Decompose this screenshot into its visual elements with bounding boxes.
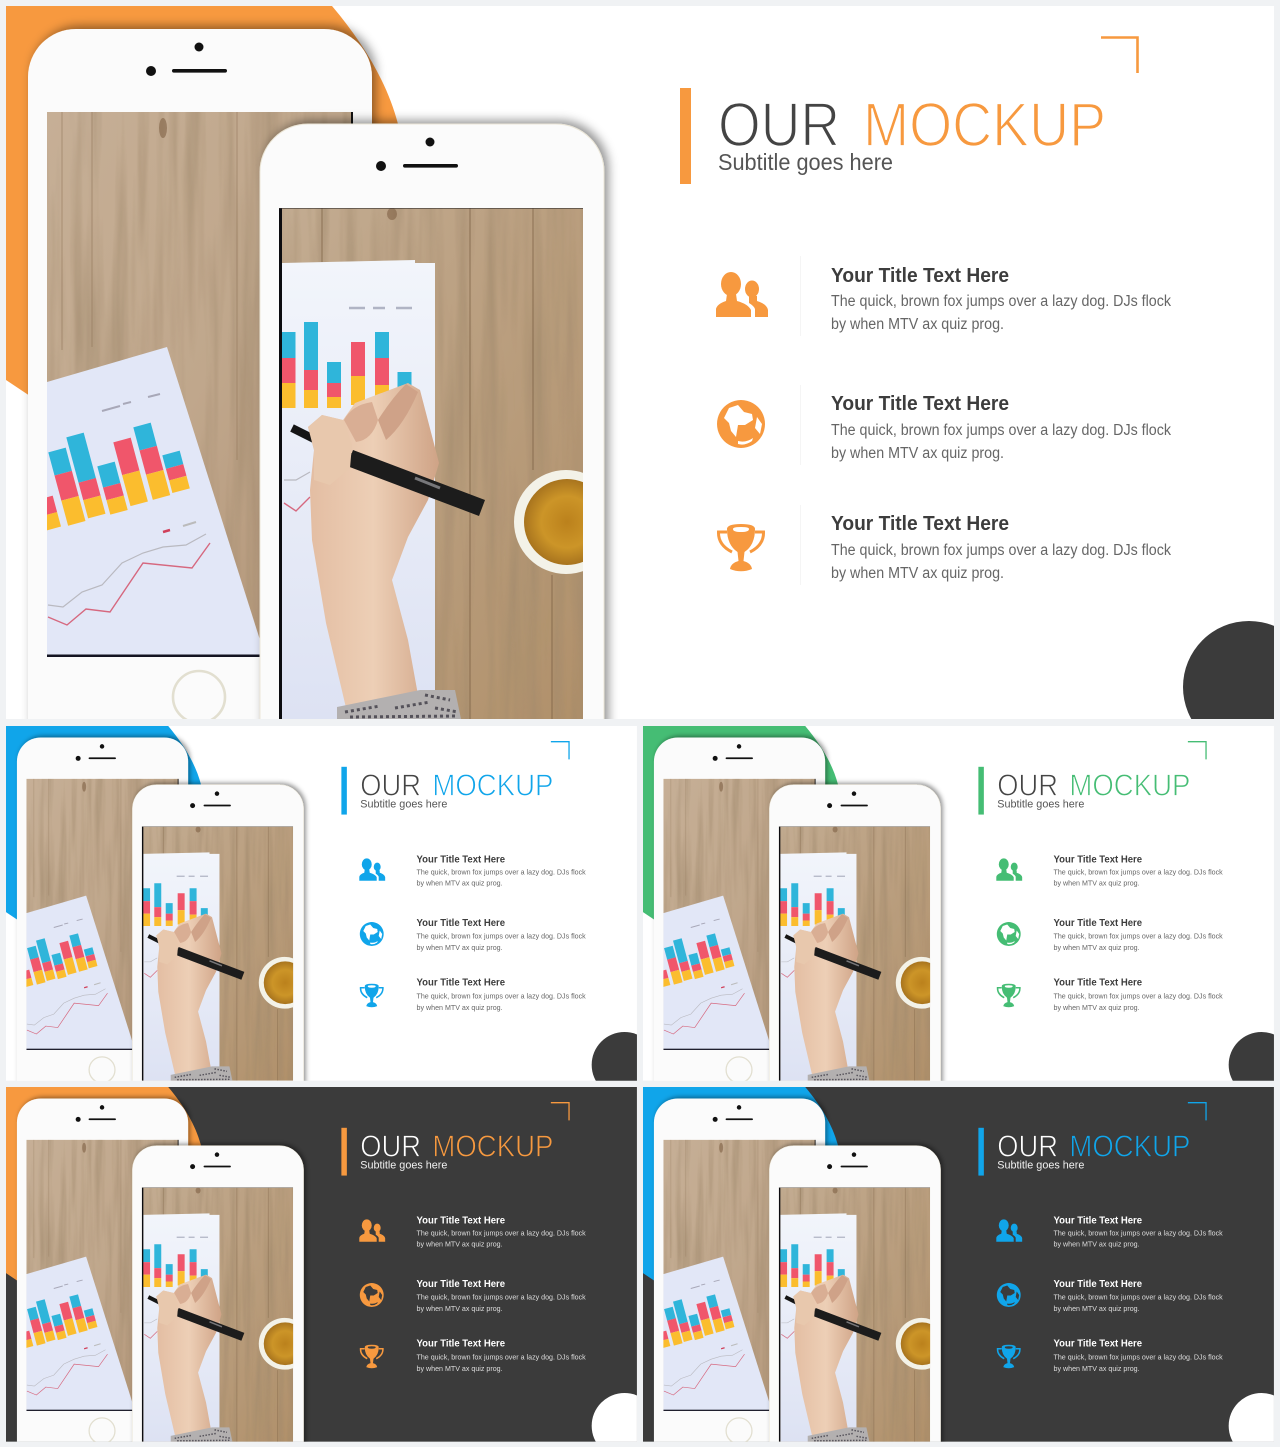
item 3: trophy — [361, 1339, 586, 1373]
heading: MOCKUP — [863, 91, 1106, 160]
heading: OUR — [997, 1129, 1058, 1164]
item 2: globe: Your Title Text Here — [831, 393, 1009, 415]
corner bracket — [1188, 1103, 1206, 1120]
accent shape behind phones — [6, 1087, 201, 1281]
heading: OUR — [718, 91, 840, 160]
item 2: globe: by when MTV ax quiz prog. — [417, 943, 503, 952]
corner circle — [592, 1393, 657, 1447]
item 1: people — [359, 1215, 586, 1249]
item 3: trophy: by when MTV ax quiz prog. — [831, 565, 1004, 582]
heading — [721, 103, 1102, 146]
item 1: people: by when MTV ax quiz prog. — [1054, 1240, 1140, 1249]
item 2: globe: by when MTV ax quiz prog. — [417, 1304, 503, 1313]
panel: small orange dark slide — [6, 1087, 657, 1447]
corner circle — [592, 1032, 637, 1081]
item 3: trophy: The quick, brown fox jumps over a lazy dog. DJs flock — [1054, 992, 1223, 1001]
heading: OUR — [360, 768, 421, 803]
corner circle — [1229, 1393, 1280, 1447]
heading: MOCKUP — [432, 1129, 553, 1164]
heading: MOCKUP — [1069, 1129, 1190, 1164]
item 2: globe: Your Title Text Here — [417, 1279, 506, 1290]
item 2: globe — [997, 918, 1223, 952]
corner bracket — [551, 742, 569, 759]
corner circle — [1183, 621, 1274, 719]
item 1: people: by when MTV ax quiz prog. — [1054, 879, 1140, 888]
item 3: trophy: The quick, brown fox jumps over a lazy dog. DJs flock — [417, 992, 586, 1001]
item 1: people: The quick, brown fox jumps over a lazy dog. DJs flock — [417, 1228, 586, 1237]
item 1: people: by when MTV ax quiz prog. — [417, 1240, 503, 1249]
item 3: trophy — [718, 505, 1171, 585]
item 3: trophy: Your Title Text Here — [417, 1339, 506, 1350]
item 3: trophy — [361, 978, 586, 1012]
heading: MOCKUP — [1069, 768, 1190, 803]
panel: small blue dark slide — [643, 1087, 1280, 1447]
heading — [998, 774, 1188, 796]
front phone mockup — [131, 780, 309, 1081]
corner bracket — [1188, 742, 1206, 759]
subtitle: Subtitle goes here — [997, 1160, 1084, 1172]
item 2: globe: by when MTV ax quiz prog. — [1054, 943, 1140, 952]
item 3: trophy: Your Title Text Here — [417, 978, 506, 989]
item 2: globe: The quick, brown fox jumps over a lazy dog. DJs flock — [831, 422, 1171, 439]
rear phone mockup — [654, 1098, 825, 1447]
subtitle: Subtitle goes here — [360, 1160, 447, 1172]
heading: OUR — [360, 1129, 421, 1164]
item 2: globe: Your Title Text Here — [1054, 918, 1143, 929]
item 1: people — [996, 1215, 1223, 1249]
item 2: globe: by when MTV ax quiz prog. — [1054, 1304, 1140, 1313]
item 1: people — [359, 854, 586, 888]
item 2: globe — [997, 1279, 1223, 1313]
item 3: trophy: by when MTV ax quiz prog. — [1054, 1003, 1140, 1012]
item 3: trophy: Your Title Text Here — [831, 513, 1009, 535]
panel: small blue light slide — [6, 726, 637, 1081]
item 1: people: The quick, brown fox jumps over a lazy dog. DJs flock — [1054, 1228, 1223, 1237]
accent shape behind phones — [6, 6, 398, 396]
item 2: globe — [717, 385, 1171, 465]
item 1: people — [996, 854, 1223, 888]
accent bar — [978, 1128, 984, 1176]
item 1: people: Your Title Text Here — [1054, 1215, 1143, 1226]
corner circle — [1228, 1032, 1274, 1081]
accent bar — [978, 767, 984, 815]
item 2: globe: The quick, brown fox jumps over a lazy dog. DJs flock — [1054, 1292, 1223, 1301]
rear phone mockup — [17, 1098, 188, 1447]
front phone mockup — [769, 1146, 948, 1447]
rear phone mockup — [654, 737, 825, 1106]
item 1: people — [716, 256, 1171, 336]
rear phone mockup — [28, 29, 372, 769]
panel: large orange light slide — [6, 6, 1274, 719]
item 2: globe — [360, 918, 586, 952]
item 3: trophy: Your Title Text Here — [1054, 978, 1143, 989]
item 2: globe — [360, 1279, 586, 1313]
heading — [360, 1129, 553, 1164]
item 3: trophy: The quick, brown fox jumps over a lazy dog. DJs flock — [417, 1353, 586, 1362]
item 1: people: by when MTV ax quiz prog. — [417, 879, 503, 888]
item 2: globe: The quick, brown fox jumps over a lazy dog. DJs flock — [417, 1292, 586, 1301]
accent shape behind phones — [643, 1087, 838, 1281]
item 3: trophy: by when MTV ax quiz prog. — [417, 1003, 503, 1012]
heading — [997, 1129, 1190, 1164]
subtitle: Subtitle goes here — [997, 799, 1084, 811]
accent bar — [341, 767, 347, 815]
accent bar — [341, 1128, 347, 1176]
item 3: trophy: by when MTV ax quiz prog. — [1054, 1364, 1140, 1373]
heading: MOCKUP — [432, 768, 553, 803]
item 1: people: Your Title Text Here — [831, 265, 1009, 287]
front phone mockup — [768, 780, 946, 1081]
corner bracket — [1101, 38, 1138, 73]
panel: small green light slide — [643, 726, 1274, 1081]
item 3: trophy: by when MTV ax quiz prog. — [417, 1364, 503, 1373]
item 1: people: The quick, brown fox jumps over a lazy dog. DJs flock — [417, 867, 586, 876]
item 1: people: The quick, brown fox jumps over a lazy dog. DJs flock — [1054, 867, 1223, 876]
item 3: trophy — [998, 978, 1223, 1012]
front phone mockup — [132, 1146, 311, 1447]
item 2: globe: by when MTV ax quiz prog. — [831, 445, 1004, 462]
accent shape behind phones — [643, 726, 838, 920]
item 3: trophy: The quick, brown fox jumps over a lazy dog. DJs flock — [1054, 1353, 1223, 1362]
accent bar — [680, 88, 691, 184]
subtitle: Subtitle goes here — [360, 799, 447, 811]
front phone mockup — [256, 114, 616, 719]
item 1: people: Your Title Text Here — [417, 854, 506, 865]
item 2: globe: The quick, brown fox jumps over a lazy dog. DJs flock — [417, 931, 586, 940]
item 2: globe: The quick, brown fox jumps over a lazy dog. DJs flock — [1054, 931, 1223, 940]
heading: OUR — [997, 768, 1058, 803]
item 1: people: by when MTV ax quiz prog. — [831, 316, 1004, 333]
item 3: trophy — [998, 1339, 1223, 1373]
accent shape behind phones — [6, 726, 201, 920]
item 1: people: The quick, brown fox jumps over a lazy dog. DJs flock — [831, 293, 1171, 310]
item 2: globe: Your Title Text Here — [417, 918, 506, 929]
subtitle: Subtitle goes here — [718, 149, 893, 175]
rear phone mockup — [17, 737, 188, 1106]
heading — [362, 774, 552, 796]
corner bracket — [551, 1103, 569, 1120]
item 3: trophy: Your Title Text Here — [1054, 1339, 1143, 1350]
item 1: people: Your Title Text Here — [417, 1215, 506, 1226]
item 2: globe: Your Title Text Here — [1054, 1279, 1143, 1290]
item 1: people: Your Title Text Here — [1054, 854, 1143, 865]
item 3: trophy: The quick, brown fox jumps over a lazy dog. DJs flock — [831, 542, 1171, 559]
